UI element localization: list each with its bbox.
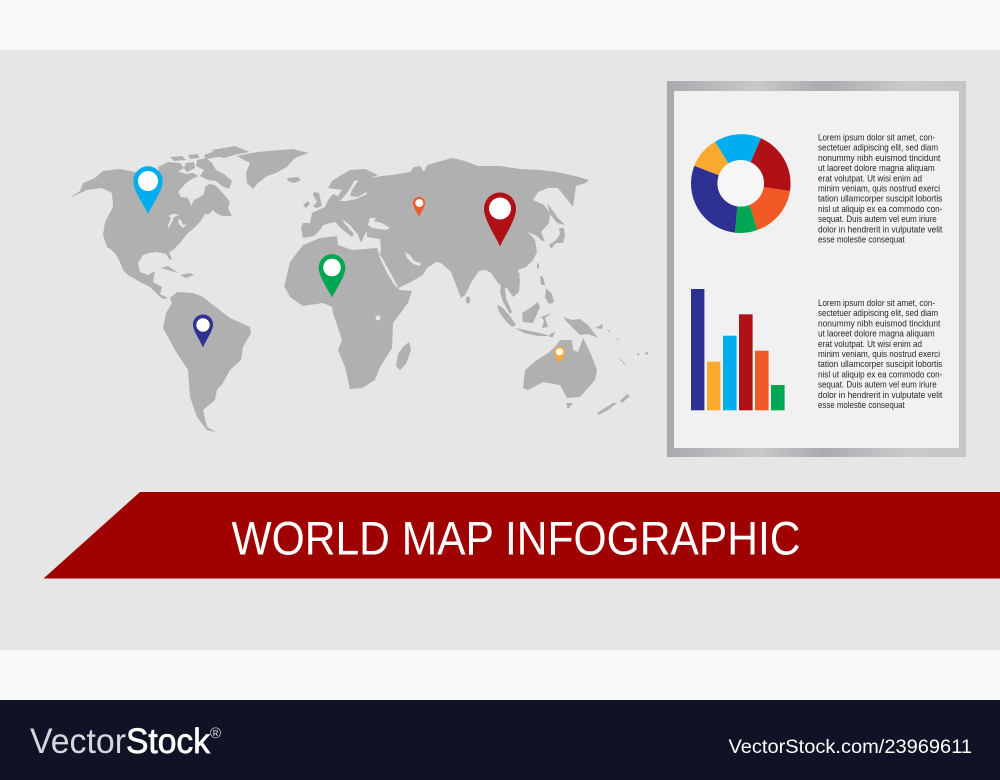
text block: bar chart description: sequat. Duis autem vel eum iriure bbox=[818, 380, 937, 390]
background panel bbox=[0, 50, 1000, 650]
Malay Peninsula bbox=[500, 284, 512, 314]
footer image id: VectorStock.com/23969611 bbox=[728, 736, 972, 758]
footer logo: Stock bbox=[126, 722, 210, 761]
text block: donut description: tation ullamcorper suscipit lobortis bbox=[818, 194, 943, 204]
text block: donut description: Lorem ipsum dolor sit amet, con- bbox=[818, 132, 935, 142]
title banner bbox=[44, 492, 1000, 578]
world map bbox=[69, 146, 649, 432]
Japan bbox=[549, 228, 565, 249]
footer logo: ® bbox=[210, 725, 221, 742]
New Zealand bbox=[597, 389, 630, 415]
Philippines bbox=[540, 276, 554, 304]
Madagascar bbox=[396, 342, 411, 370]
Red Sea bbox=[379, 256, 398, 287]
continent: Africa bbox=[284, 236, 412, 389]
text block: donut description: dolor in hendrerit in vulputate velit bbox=[818, 224, 943, 234]
panel: charts bbox=[667, 81, 966, 457]
text block: donut description: sequat. Duis autem vel eum iriure bbox=[818, 214, 937, 224]
pin: orange, Russia bbox=[413, 197, 425, 217]
text block: donut description: erat volutpat. Ut wisi enim ad bbox=[818, 173, 922, 183]
Sulawesi bbox=[541, 313, 552, 328]
Lake Victoria bbox=[376, 316, 380, 320]
pin: yellow, Australia bbox=[554, 347, 565, 364]
Caribbean islands bbox=[161, 266, 194, 278]
title: WORLD MAP INFOGRAPHIC bbox=[232, 512, 800, 564]
Sakhalin bbox=[547, 203, 565, 225]
continent: South America bbox=[163, 292, 251, 432]
Persian Gulf bbox=[405, 252, 421, 266]
text block: donut description: nisl ut aliquip ex ea commodo con- bbox=[818, 204, 942, 214]
text block: bar chart description: nonummy nibh euismod tincidunt bbox=[818, 318, 941, 328]
pin: green, Africa bbox=[319, 254, 345, 298]
text block: bar chart description: erat volutpat. Ut wisi enim ad bbox=[818, 339, 922, 349]
text block: bar chart description: tation ullamcorper suscipit lobortis bbox=[818, 359, 943, 369]
Black Sea bbox=[368, 218, 390, 230]
continent: Eurasia bbox=[301, 158, 589, 298]
Taiwan and Hainan bbox=[517, 263, 539, 276]
Baltic Sea bbox=[340, 180, 367, 201]
text block: bar chart description: esse molestie consequat bbox=[818, 400, 905, 410]
text block: donut description: nonummy nibh euismod tincidunt bbox=[818, 153, 941, 163]
text block: donut description: sectetuer adipiscing elit, sed diam bbox=[818, 143, 938, 153]
text block: bar chart description: ut laoreet dolore magna aliquam bbox=[818, 329, 935, 339]
Sumatra bbox=[497, 305, 516, 327]
text block: bar chart description: dolor in hendrerit in vulputate velit bbox=[818, 390, 943, 400]
footer logo: Vector bbox=[30, 722, 126, 761]
pin: blue, North America bbox=[133, 166, 163, 214]
Java and Lesser Sunda bbox=[515, 328, 555, 337]
British Isles bbox=[303, 192, 322, 208]
Iceland bbox=[287, 177, 301, 183]
Sri Lanka bbox=[466, 296, 470, 304]
text block: bar chart description: minim veniam, quis nostrud exerci bbox=[818, 349, 940, 359]
Australia bbox=[523, 338, 597, 398]
New Guinea bbox=[563, 317, 598, 338]
Tasmania bbox=[566, 403, 573, 409]
pin: red, Asia bbox=[484, 192, 516, 246]
Arctic islands bbox=[158, 146, 250, 189]
Pacific islands bbox=[595, 324, 649, 365]
text block: donut description: minim veniam, quis nostrud exerci bbox=[818, 184, 940, 194]
Greenland bbox=[237, 149, 309, 189]
text block: bar chart description: sectetuer adipiscing elit, sed diam bbox=[818, 308, 938, 318]
Baja California gulf bbox=[108, 248, 116, 264]
Great Lakes bbox=[168, 214, 187, 228]
footer logo bbox=[30, 722, 221, 761]
donut chart bbox=[691, 134, 791, 233]
pin: navy, South America bbox=[193, 314, 213, 348]
text block: donut description: ut laoreet dolore magna aliquam bbox=[818, 163, 935, 173]
Borneo bbox=[522, 302, 540, 323]
text block: bar chart description: Lorem ipsum dolor sit amet, con- bbox=[818, 298, 935, 308]
continent: North America bbox=[69, 169, 232, 299]
text block: donut description: esse molestie consequat bbox=[818, 234, 905, 244]
footer bar bbox=[0, 700, 1000, 780]
bar chart bbox=[691, 289, 785, 410]
text block: bar chart description: nisl ut aliquip ex ea commodo con- bbox=[818, 369, 942, 379]
